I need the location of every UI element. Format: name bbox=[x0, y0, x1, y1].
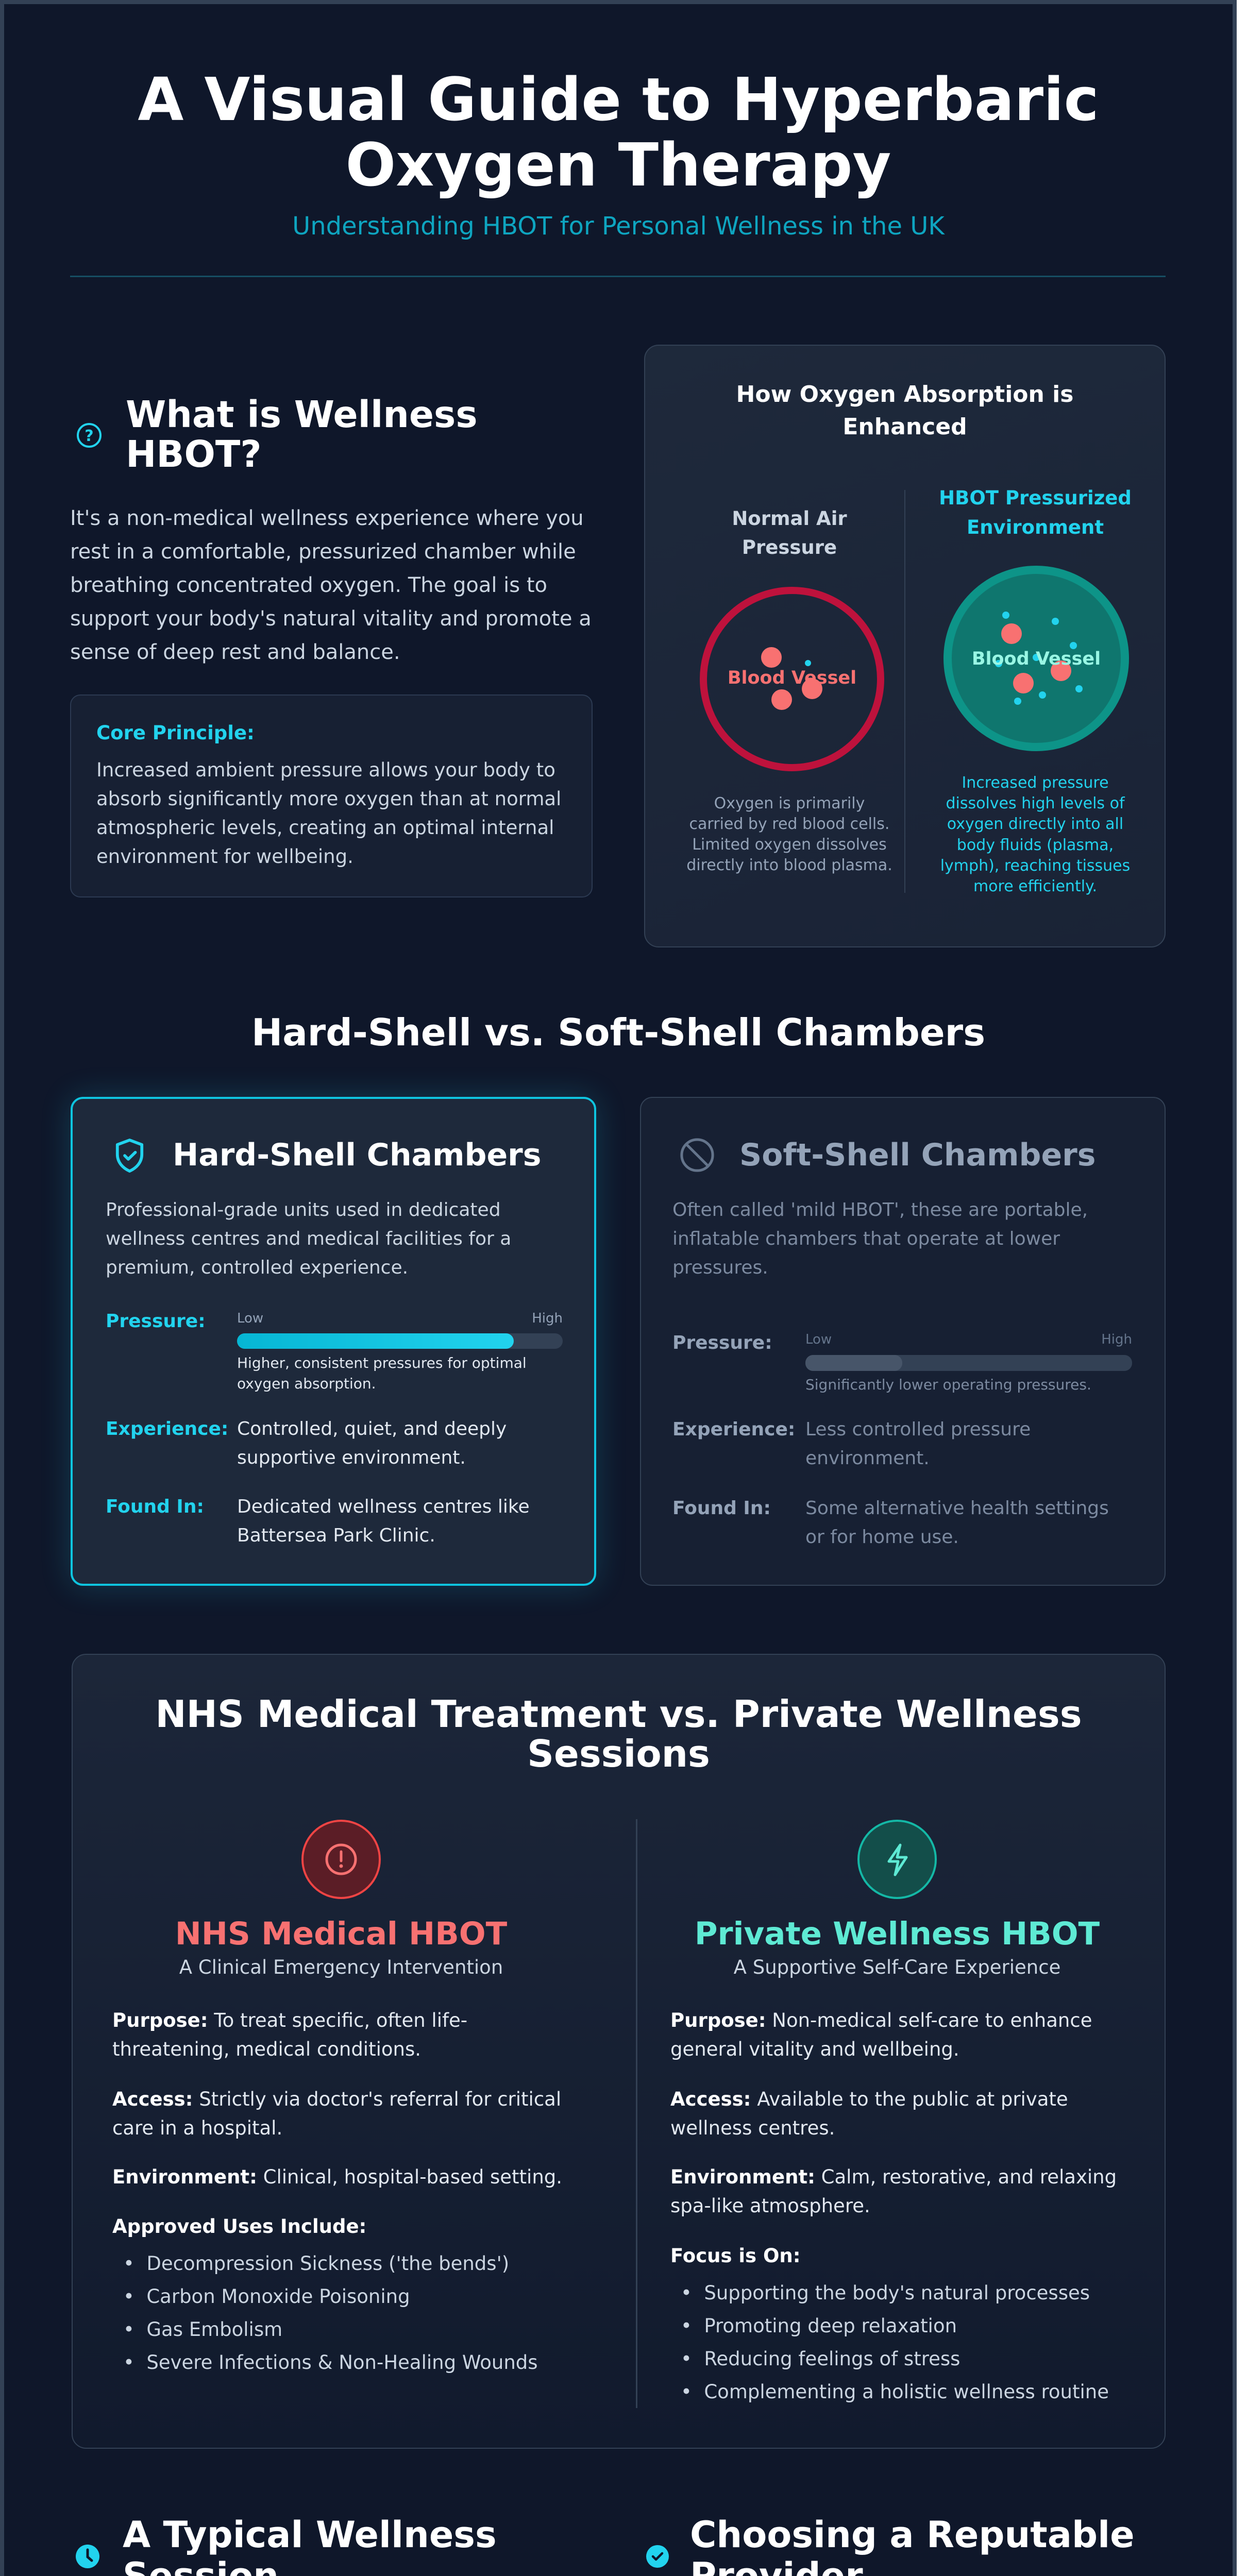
bar: high pressure bbox=[237, 1333, 563, 1349]
row: pressure: Low bbox=[237, 1311, 263, 1326]
heading: what is wellness hbot: What is Wellness bbox=[126, 393, 478, 436]
caption: hbot bbox=[940, 774, 1130, 895]
text: private details: Access: Available to the public at private bbox=[670, 2088, 1068, 2110]
title: hard-shell: Hard-Shell Chambers bbox=[173, 1137, 541, 1173]
text: hard-shell description bbox=[106, 1199, 511, 1278]
row: experience: Controlled, quiet, and deeply bbox=[237, 1418, 507, 1439]
text: private details: Focus is On: bbox=[670, 2245, 801, 2267]
text: nhs details: threatening, medical conditions. bbox=[112, 2038, 421, 2060]
row: found in bbox=[672, 1498, 1109, 1548]
text: nhs details: care in a hospital. bbox=[112, 2117, 282, 2139]
text: nhs details: Environment: Clinical, hospital-based setting. bbox=[112, 2166, 562, 2188]
label: hbot environment bbox=[939, 487, 1132, 538]
subtitle: Understanding HBOT for Personal Wellness in the UK bbox=[292, 212, 945, 241]
heading: absorption bbox=[736, 381, 1073, 440]
caption: hbot: body fluids (plasma, bbox=[957, 836, 1114, 854]
row: pressure: Significantly lower operating pressures. bbox=[805, 1376, 1091, 1393]
text: hard-shell description: wellness centres and medical facilities for a bbox=[106, 1228, 511, 1249]
icon: clock bbox=[75, 2544, 100, 2569]
row: pressure bbox=[106, 1311, 563, 1392]
row: pressure: Low bbox=[805, 1332, 832, 1347]
title bbox=[138, 65, 1099, 200]
text: intro paragraph: sense of deep rest and balance. bbox=[70, 640, 400, 664]
text: intro paragraph: rest in a comfortable, pressurized chamber while bbox=[70, 540, 576, 564]
subtitle: private: A Supportive Self-Care Experience bbox=[734, 1956, 1060, 1978]
panel: soft-shell bbox=[640, 1097, 1166, 1586]
row: experience: supportive environment. bbox=[237, 1447, 466, 1468]
icon: question bbox=[77, 423, 102, 448]
list: focus: • Promoting deep relaxation bbox=[681, 2315, 957, 2337]
text: intro paragraph: It's a non-medical wellness experience where you bbox=[70, 506, 584, 530]
icon: no sign bbox=[680, 1138, 714, 1172]
row: pressure: Pressure: bbox=[672, 1332, 772, 1353]
label: normal air bbox=[732, 507, 847, 558]
heading: choosing provider: Choosing a Reputable bbox=[690, 2514, 1135, 2556]
text: soft-shell description bbox=[672, 1199, 1088, 1278]
heading: typical session bbox=[123, 2514, 497, 2576]
vessel: normal: Blood Vessel bbox=[728, 668, 856, 688]
caption: hbot: Increased pressure bbox=[962, 774, 1109, 792]
list: focus: • Reducing feelings of stress bbox=[681, 2348, 960, 2370]
bar: low pressure bbox=[805, 1355, 1132, 1371]
text: private details bbox=[670, 2006, 1134, 2377]
text: core principle: environment for wellbeing. bbox=[96, 845, 353, 868]
heading: what is wellness hbot bbox=[126, 393, 478, 476]
title: soft-shell: Soft-Shell Chambers bbox=[739, 1137, 1096, 1173]
heading: chambers: Hard-Shell vs. Soft-Shell Chambers bbox=[251, 1011, 985, 1054]
heading: typical session: A Typical Wellness bbox=[123, 2514, 497, 2556]
vessel: hbot: Blood Vessel bbox=[972, 649, 1101, 669]
text: private details: spa-like atmosphere. bbox=[670, 2195, 870, 2217]
caption: hbot: lymph), reaching tissues bbox=[940, 857, 1130, 875]
list: approved uses: • Decompression Sickness ('the bends') bbox=[123, 2252, 509, 2275]
icon: alert bbox=[301, 1820, 381, 1899]
heading: absorption: Enhanced bbox=[842, 414, 967, 440]
row: pressure: Pressure: bbox=[106, 1311, 206, 1332]
row: found in bbox=[106, 1496, 530, 1546]
caption: hbot: dissolves high levels of bbox=[946, 794, 1125, 812]
list: approved uses: • Gas Embolism bbox=[123, 2318, 282, 2341]
vessel: hbot bbox=[948, 570, 1125, 747]
list: approved uses: • Severe Infections & Non-Healing Wounds bbox=[123, 2351, 538, 2374]
list: approved uses: • Carbon Monoxide Poisoning bbox=[123, 2285, 410, 2308]
heading: core principle: Core Principle: bbox=[96, 722, 255, 744]
list: focus bbox=[681, 2277, 1109, 2409]
caption: normal bbox=[686, 794, 892, 874]
row: experience bbox=[106, 1418, 507, 1468]
label: hbot environment: Environment bbox=[967, 516, 1104, 538]
panel: hard-shell bbox=[71, 1097, 596, 1586]
caption: hbot: oxygen directly into all bbox=[947, 815, 1123, 833]
row: found in: Found In: bbox=[106, 1496, 204, 1517]
row: pressure: High bbox=[1101, 1332, 1132, 1347]
text: private details: Environment: Calm, restorative, and relaxing bbox=[670, 2166, 1117, 2188]
caption: normal: Limited oxygen dissolves bbox=[692, 836, 887, 854]
subtitle: nhs: A Clinical Emergency Intervention bbox=[179, 1956, 503, 1978]
title: private: Private Wellness HBOT bbox=[695, 1916, 1100, 1952]
list: approved uses bbox=[123, 2247, 538, 2379]
diagram: blood vessels bbox=[700, 566, 1129, 771]
text: core principle bbox=[96, 759, 561, 868]
caption: hbot: more efficiently. bbox=[973, 877, 1097, 895]
text: private details: wellness centres. bbox=[670, 2117, 835, 2139]
caption: normal: carried by red blood cells. bbox=[689, 815, 889, 833]
text: soft-shell description: Often called 'mild HBOT', these are portable, bbox=[672, 1199, 1088, 1221]
heading: nhs vs private: NHS Medical Treatment vs. Private Wellness bbox=[155, 1692, 1082, 1736]
heading: nhs vs private bbox=[155, 1692, 1082, 1775]
icon: lightning bbox=[857, 1819, 937, 1900]
icon: check circle bbox=[646, 2545, 669, 2568]
text: private details: general vitality and wellbeing. bbox=[670, 2038, 959, 2060]
text: soft-shell description: pressures. bbox=[672, 1257, 768, 1278]
row: experience: environment. bbox=[805, 1448, 930, 1469]
text: nhs details: Purpose: To treat specific, often life- bbox=[112, 2009, 467, 2031]
heading: nhs vs private: Sessions bbox=[527, 1732, 710, 1775]
list: focus: • Supporting the body's natural processes bbox=[681, 2282, 1090, 2304]
label: hbot environment: HBOT Pressurized bbox=[939, 487, 1132, 509]
row: pressure: Higher, consistent pressures for optimal bbox=[237, 1354, 527, 1371]
text: core principle: atmospheric levels, creating an optimal internal bbox=[96, 817, 554, 839]
text: nhs details: Approved Uses Include: bbox=[112, 2215, 366, 2238]
row: found in: Dedicated wellness centres like bbox=[237, 1496, 530, 1517]
row: experience: Experience: bbox=[106, 1418, 228, 1439]
text: hard-shell description: Professional-grade units used in dedicated bbox=[106, 1199, 501, 1221]
title: nhs: NHS Medical HBOT bbox=[175, 1916, 507, 1952]
text: nhs details bbox=[112, 2009, 562, 2374]
icon: question: ? bbox=[85, 427, 94, 445]
text: core principle: Increased ambient pressure allows your body to bbox=[96, 759, 555, 781]
title: A Visual Guide to Hyperbaric bbox=[138, 65, 1099, 134]
text: core principle: absorb significantly more oxygen than at normal bbox=[96, 788, 561, 810]
panel: core principle bbox=[70, 694, 593, 897]
text: hard-shell description: premium, controlled experience. bbox=[106, 1257, 408, 1278]
row: pressure: High bbox=[532, 1311, 563, 1326]
caption: normal: directly into blood plasma. bbox=[686, 856, 892, 874]
heading: choosing provider bbox=[690, 2514, 1135, 2576]
heading: what is wellness hbot: HBOT? bbox=[126, 433, 262, 476]
text: soft-shell description: inflatable chambers that operate at lower bbox=[672, 1228, 1060, 1249]
list: focus: • Complementing a holistic wellness routine bbox=[681, 2381, 1109, 2403]
label: normal air: Normal Air bbox=[732, 507, 847, 530]
vessel: normal bbox=[703, 590, 881, 768]
text: private details: Purpose: Non-medical self-care to enhance bbox=[670, 2009, 1092, 2031]
text: intro paragraph: breathing concentrated oxygen. The goal is to bbox=[70, 573, 547, 597]
title: Oxygen Therapy bbox=[345, 131, 891, 200]
panel: nhs vs private bbox=[72, 1654, 1166, 2449]
caption: normal: Oxygen is primarily bbox=[714, 794, 865, 812]
panel: hard-shell: oxygen absorption. bbox=[237, 1375, 376, 1392]
row: found in: Battersea Park Clinic. bbox=[237, 1525, 435, 1546]
row: found in: Some alternative health settings bbox=[805, 1498, 1109, 1519]
row: experience: Less controlled pressure bbox=[805, 1419, 1031, 1440]
icon: shield bbox=[115, 1139, 143, 1173]
row: pressure bbox=[672, 1332, 1132, 1393]
label: normal air: Pressure bbox=[742, 536, 837, 558]
row: experience: Experience: bbox=[672, 1419, 795, 1440]
row: found in: Found In: bbox=[672, 1498, 771, 1519]
panel: oxygen absorption bbox=[644, 345, 1166, 947]
row: found in: or for home use. bbox=[805, 1527, 959, 1548]
row: experience bbox=[672, 1419, 1031, 1469]
text: nhs details: Access: Strictly via doctor's referral for critical bbox=[112, 2088, 561, 2110]
text: intro paragraph: support your body's natural vitality and promote a bbox=[70, 607, 592, 631]
heading: absorption: How Oxygen Absorption is bbox=[736, 381, 1073, 408]
text: intro paragraph bbox=[70, 506, 592, 664]
